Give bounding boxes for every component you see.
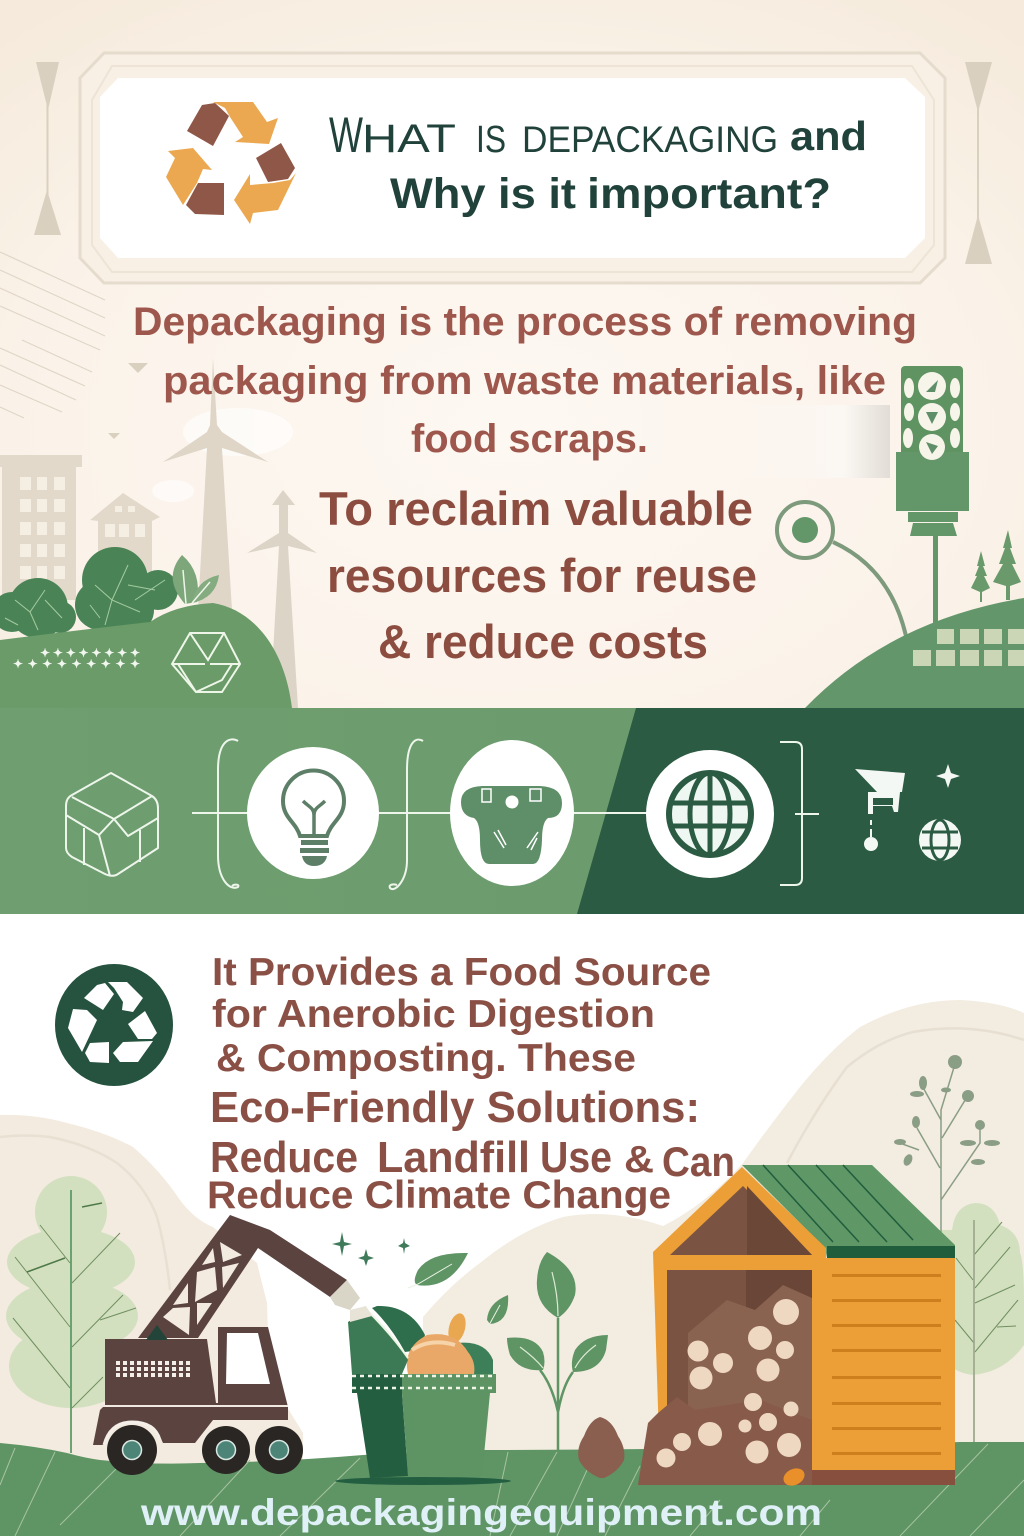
cab hatch [146,1325,168,1340]
icon: light bulb [247,747,379,879]
base [812,1470,955,1485]
right tree [930,1203,1024,1442]
bag [348,1310,408,1374]
title text: W [329,107,364,163]
lower paragraph [207,951,735,1217]
icon: orange and brown recycling arrows [166,102,296,224]
lower white background [0,914,1024,1536]
lower paragraph: It Provides a Food Source [212,951,711,994]
slats [832,1274,941,1455]
green roof [742,1165,955,1258]
icon: small cart [855,769,905,851]
intro paragraph [133,300,917,461]
icon: small globe [919,819,961,861]
orange lump [781,1465,807,1489]
nozzle [330,1280,360,1310]
wheels [104,1422,303,1475]
icon: diaper circle [450,740,574,886]
title text: IS [476,119,506,161]
goal text: resources for reuse [327,549,757,602]
connector lines [192,739,819,889]
icon: target with curved line [777,502,906,636]
bush texture [5,565,165,630]
grass [0,1442,1024,1536]
website url: www.depackagingequipment.com [140,1492,822,1533]
intro paragraph: packaging from waste materials, like [163,359,886,403]
side ornament right [965,62,992,264]
top background [0,0,1024,710]
title text: DEPACKAGING [522,119,778,160]
lower paragraph: Reduce [210,1133,358,1182]
waste bin with food [330,1280,511,1485]
orange frame [653,1167,955,1470]
lower paragraph: & [624,1139,654,1181]
icon: green tower [896,366,969,626]
right leaf [455,1343,493,1374]
bin body [357,1393,408,1478]
gable [670,1186,812,1255]
spilled compost [638,1397,812,1485]
lower paragraph: Landfill [377,1133,530,1182]
icon: box outline [66,773,158,876]
lower paragraph: Eco-Friendly Solutions: [210,1083,700,1132]
left hill with bushes and icon [0,547,292,708]
lower paragraph: Reduce Climate Change [207,1174,671,1217]
crane arm [138,1215,347,1338]
title text: and [790,113,867,159]
title frame [80,53,945,283]
side ornament left [34,62,61,235]
city buildings [0,455,160,600]
vent dots [116,1363,192,1375]
decorative hatching [0,252,105,418]
lower paragraph: Can [662,1138,735,1185]
wind turbine small [247,490,317,708]
lower paragraph: for Anerobic Digestion [212,993,655,1036]
shed interior [667,1270,812,1470]
goal text [319,482,757,668]
faded patch [660,405,890,478]
title text: important? [587,170,831,218]
left tree [6,1176,138,1453]
intro paragraph: Depackaging is the process of removing [133,300,917,344]
leaves on hill [173,555,219,604]
body stripe [100,1405,288,1407]
hill dots: ✦✦✦✦✦✦✦✦ [40,646,140,660]
right hill with squares [805,598,1024,708]
icon: outlined recycle box [172,633,240,692]
goal text: To reclaim valuable [319,482,753,535]
compost shed [638,1165,955,1489]
title text [329,107,867,218]
bin rim [352,1374,402,1393]
truck with crane [93,1215,347,1475]
bin shadow [335,1477,511,1485]
food [445,1311,469,1345]
lower paragraph: & Composting. These [216,1037,636,1080]
intro paragraph: food scraps. [411,417,648,461]
title text: HAT [362,117,456,161]
pine cone [578,1417,624,1478]
cream hills [0,1000,1024,1470]
floating leaves [408,1253,508,1327]
hill dots [13,646,140,671]
wind turbine large [163,358,268,610]
hill dots: ✦✦✦✦✦✦✦✦✦ [13,657,140,671]
title panel [100,78,925,258]
bushes [0,547,178,638]
branching sapling with leaves [894,1055,1000,1232]
lower paragraph: Use [540,1133,612,1182]
pine trees [971,530,1021,602]
bag leaf [372,1306,425,1352]
icon: dark recycle badge [55,964,173,1086]
goal text: & reduce costs [378,615,708,668]
icon: globe [646,750,774,878]
truck body [93,1327,288,1445]
icon: sparkle [936,764,960,788]
cab window [226,1333,270,1384]
title text: Why is it [390,170,576,218]
clouds [152,408,293,502]
middle green band [0,708,1024,914]
sparkles [332,1232,410,1266]
compost lumps [656,1299,801,1468]
young plant [507,1252,608,1452]
small decorative triangles [108,363,148,439]
